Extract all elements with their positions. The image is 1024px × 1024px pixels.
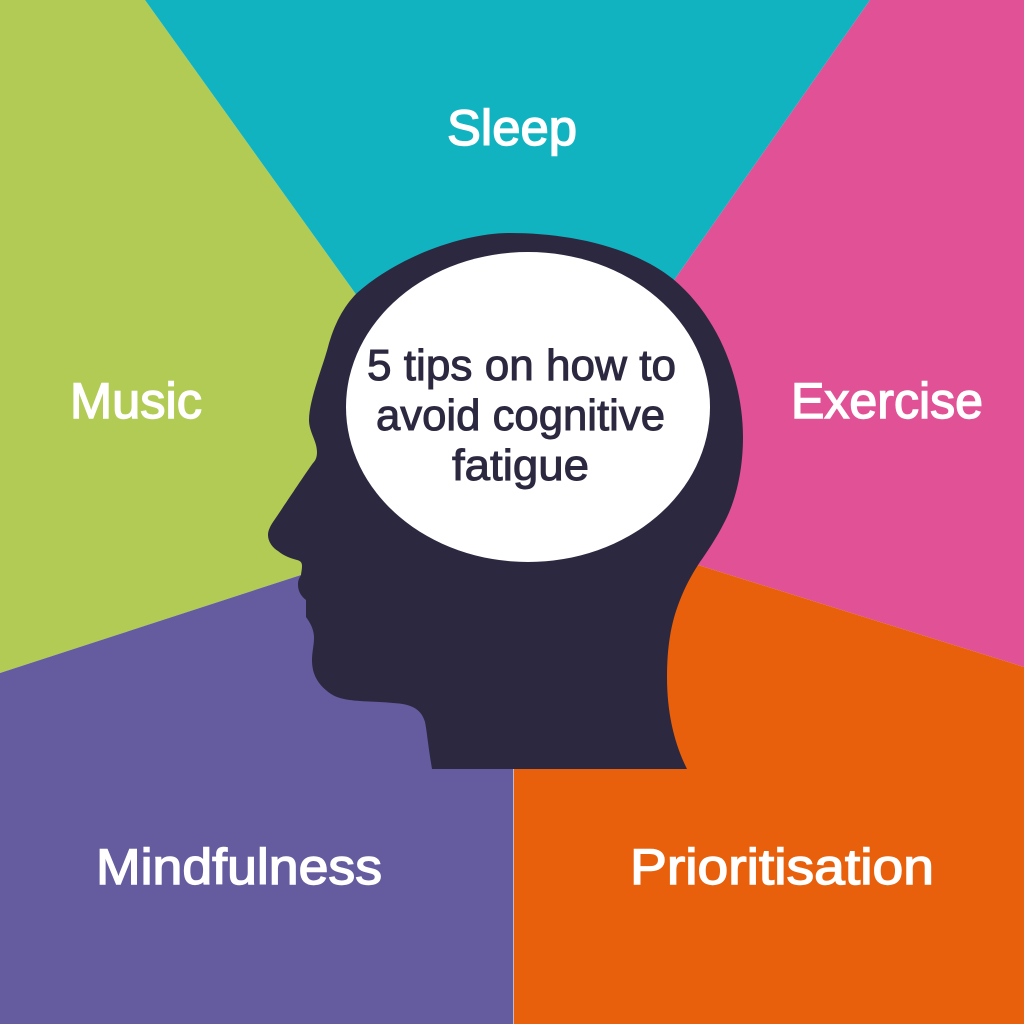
title: 5 tips on how to [367,341,676,390]
panel: exercise: Exercise [791,373,983,429]
title: avoid cognitive [376,391,665,440]
icon: head silhouette [268,233,743,769]
panel: sleep: Sleep [447,100,577,156]
panel: music: Music [70,373,202,429]
panel: prioritisation: Prioritisation [630,839,934,895]
title: fatigue [452,441,589,490]
panel: mindfulness [0,575,513,1024]
centre brain bubble [346,252,710,562]
panel: mindfulness: Mindfulness [96,839,382,895]
panel: prioritisation [514,565,1024,1024]
